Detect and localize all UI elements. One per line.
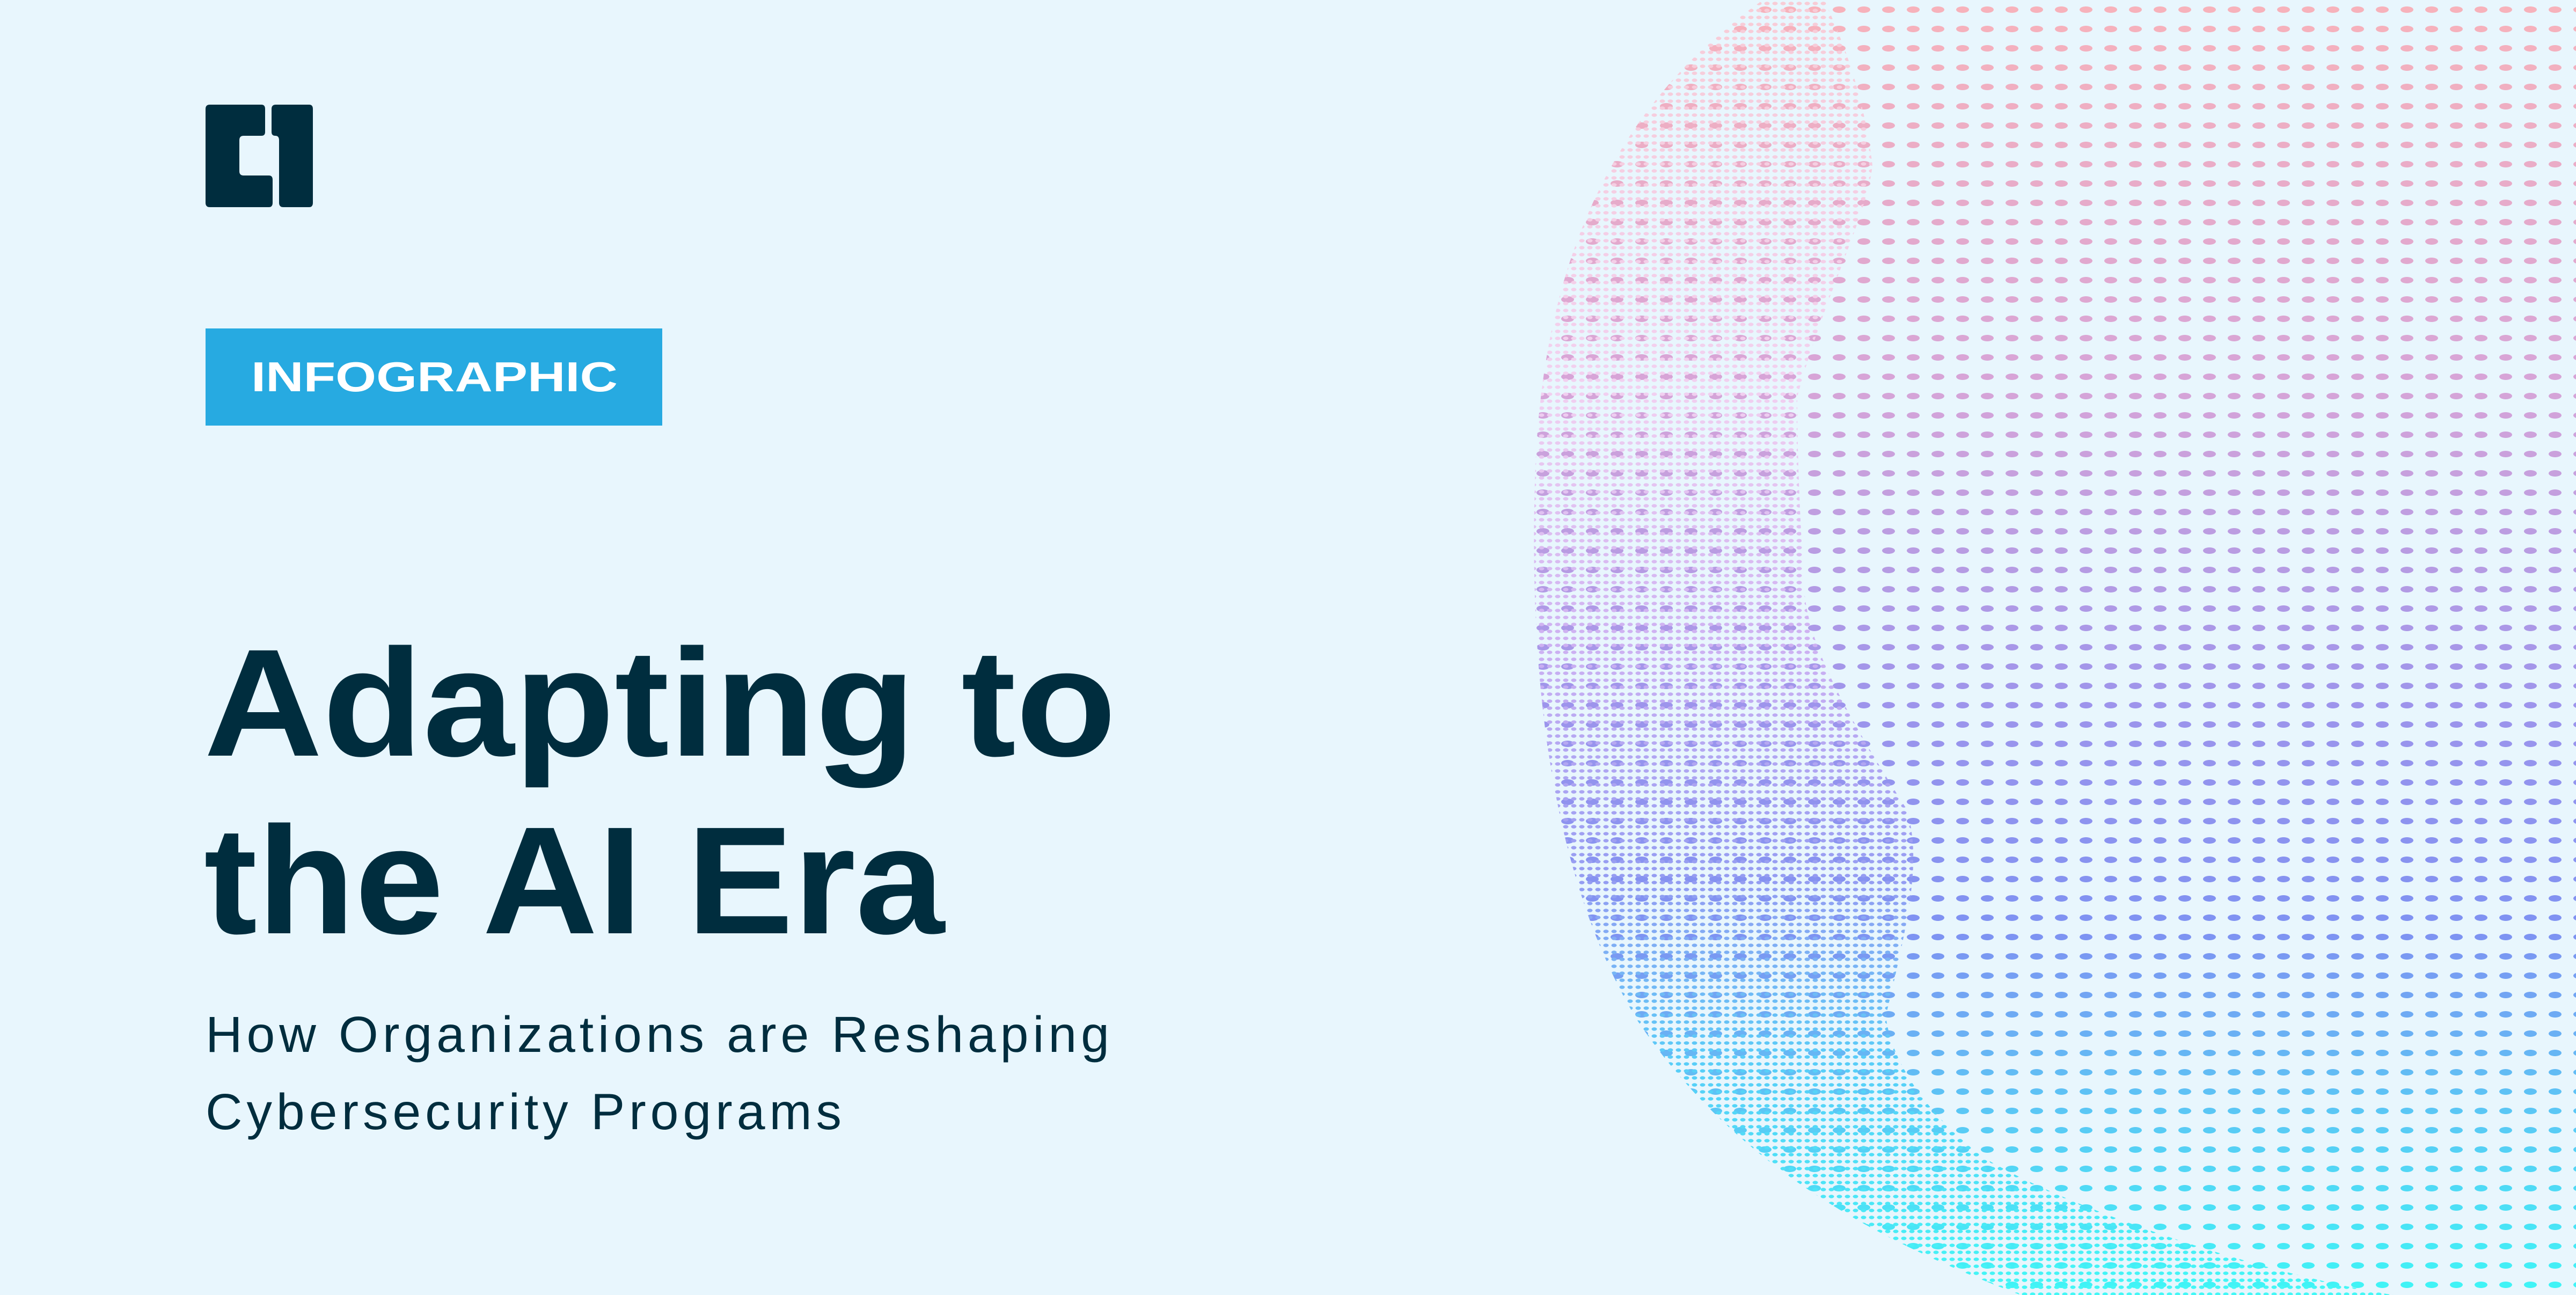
subtitle: Cybersecurity Programs xyxy=(206,1084,841,1140)
title: Adapting to xyxy=(204,618,1116,789)
badge: INFOGRAPHIC: INFOGRAPHIC xyxy=(251,353,618,400)
badge: INFOGRAPHIC xyxy=(206,328,662,426)
logo xyxy=(206,105,313,207)
subtitle: How Organizations are Reshaping xyxy=(206,1006,1109,1063)
subtitle xyxy=(206,1006,1109,1140)
wave: dense dot band xyxy=(1534,2,2393,1295)
wave: sparse dot field xyxy=(1503,0,2576,1295)
title xyxy=(204,618,1116,966)
title: the AI Era xyxy=(204,795,946,966)
